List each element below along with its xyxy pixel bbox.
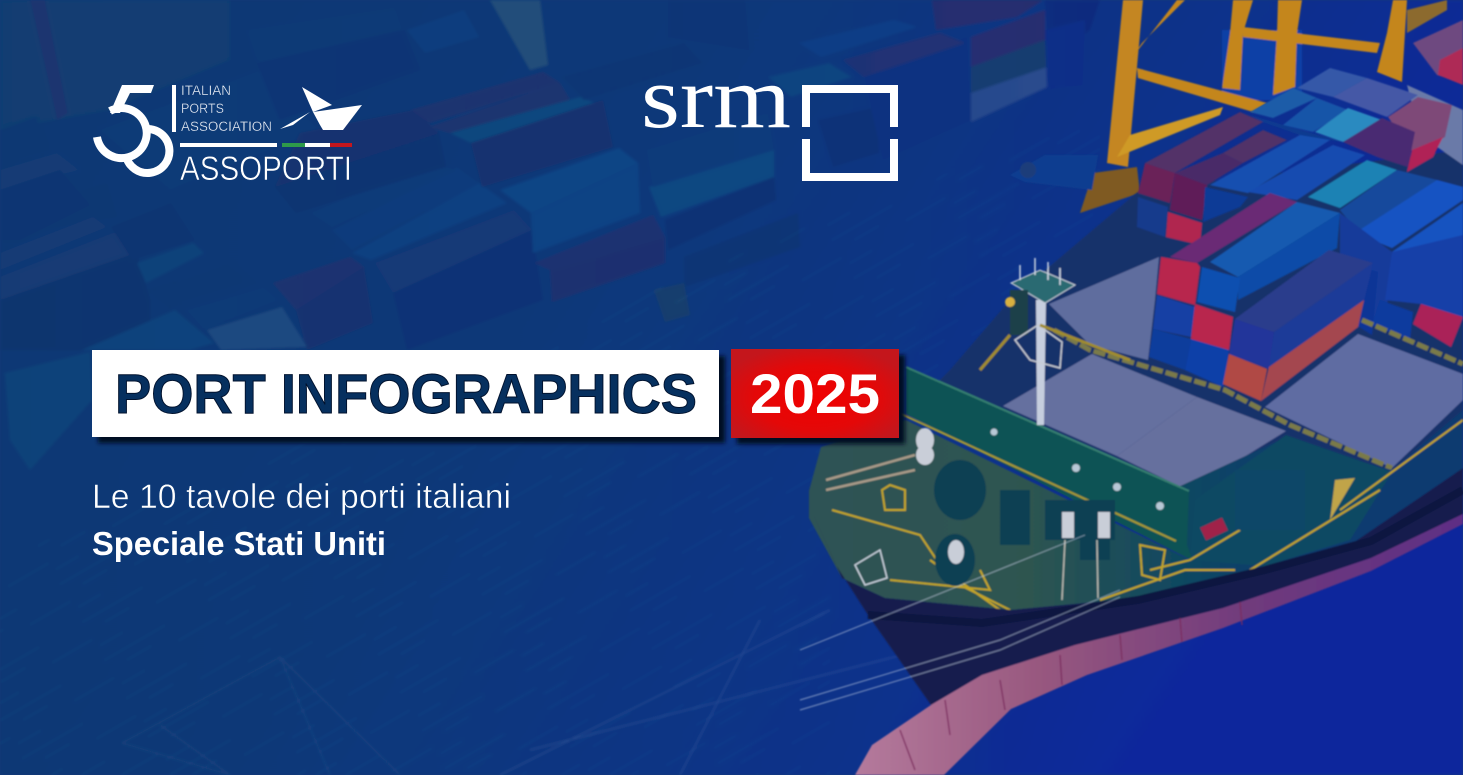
banner shadows (98, 355, 905, 444)
ship underlay (906, 150, 1463, 545)
hatch covers (1049, 257, 1159, 360)
year plate (731, 349, 899, 438)
subtitle bold line: Speciale Stati Uniti (92, 525, 386, 562)
numeral 55 (97, 85, 169, 173)
srm wordmark: srm (641, 50, 791, 147)
bow deck (809, 410, 1463, 610)
mast (980, 258, 1130, 425)
logo descriptor: PORTS (181, 101, 224, 116)
photo: gantry crane (1010, 0, 1447, 213)
logo: SRM (641, 50, 894, 177)
far deck (1407, 85, 1463, 165)
title plate (92, 350, 719, 437)
title text: PORT INFOGRAPHICS (115, 362, 697, 425)
srm square mark (806, 89, 894, 177)
mooring lines (800, 535, 1120, 710)
hatch edge rail (1054, 320, 1463, 468)
logo rule and flag (180, 143, 352, 147)
logo ship icon (280, 87, 362, 130)
red hull boot-top (855, 514, 1463, 775)
photo: container ship (800, 20, 1463, 775)
logo descriptor: ITALIAN (181, 83, 231, 98)
logo descriptor: ASSOCIATION (181, 119, 272, 134)
subtitle: Le 10 tavole dei porti italiani (92, 478, 511, 516)
stacked containers: front block (1149, 193, 1373, 401)
title banner (92, 349, 905, 444)
stacked containers: rear rows (1137, 68, 1463, 347)
logo: Assoporti 55 (97, 83, 362, 188)
green bulwark (906, 367, 1193, 561)
foredeck equipment (832, 420, 1463, 610)
dark hull (809, 468, 1463, 705)
logo vertical bar (172, 85, 176, 132)
year text: 2025 (750, 362, 880, 425)
logo wordmark: ASSOPORTI (180, 150, 352, 188)
logo descriptor (181, 83, 272, 134)
